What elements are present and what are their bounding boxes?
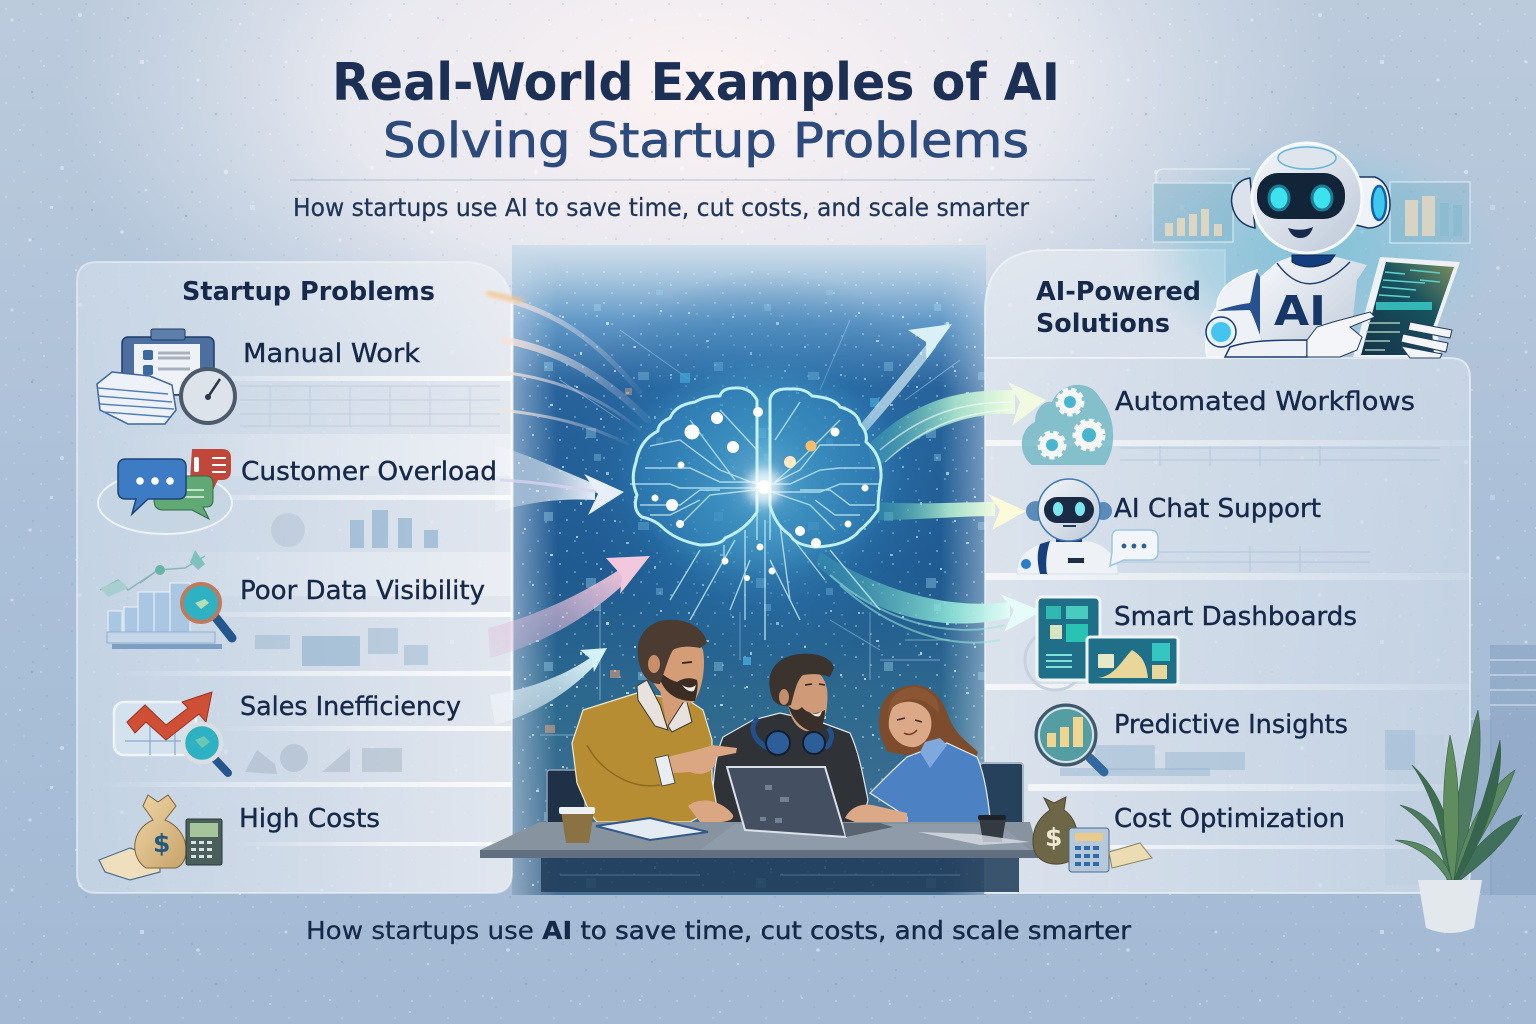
table top — [480, 822, 1038, 892]
coffee cup right — [978, 815, 1006, 842]
arrow: poor data visibility — [488, 556, 650, 658]
flow arrows out of brain — [816, 324, 1046, 643]
person: man in dark sweater — [712, 654, 868, 823]
flow arrows into brain — [488, 293, 650, 725]
left background chart — [1153, 169, 1250, 242]
label: manual work: Manual Work — [243, 339, 420, 369]
label: sales inefficiency: Sales Inefficiency — [240, 692, 461, 722]
right chair — [980, 763, 1023, 825]
label: cost optimization: Cost Optimization — [1114, 804, 1345, 834]
label: smart dashboards: Smart Dashboards — [1114, 602, 1357, 632]
label: predictive insights: Predictive Insights — [1114, 710, 1348, 740]
brain outline — [633, 388, 881, 547]
title: Solving Startup Problems — [383, 113, 1029, 169]
label: high costs: High Costs — [239, 804, 380, 834]
icon: chat bubbles — [98, 449, 232, 534]
laptop — [727, 767, 893, 837]
person: woman in blue shirt — [845, 685, 990, 827]
icon: money bag and calculator — [1033, 797, 1152, 872]
panel: AI-powered solutions — [985, 250, 1470, 893]
arrow: sales inefficiency — [490, 648, 607, 725]
background: skyline at right edge — [1385, 645, 1536, 895]
brain nodes — [652, 407, 868, 581]
brain core spark — [746, 469, 782, 505]
panel: center data scene — [512, 245, 986, 895]
heading: startup problems: Startup Problems — [182, 277, 435, 307]
plant pot — [1418, 880, 1482, 933]
arrow: automated workflows — [868, 382, 1046, 472]
icon: gears on cloud — [1022, 385, 1113, 465]
icon: clipboard, papers and clock — [97, 329, 235, 424]
icon: money bag and calculator — [99, 795, 222, 880]
notebook — [596, 818, 708, 840]
subtitle: How startups use AI to save time, cut costs, and scale smarter — [293, 193, 1030, 222]
robot hands — [1307, 312, 1452, 358]
icon: sales trend with magnifier — [114, 692, 228, 773]
icon: chat robot — [1017, 479, 1158, 574]
arrow: AI chat support — [878, 494, 1026, 530]
title divider — [290, 179, 1095, 181]
robot tablet — [1353, 257, 1460, 357]
icon: money bag and calculator: $ — [1045, 823, 1062, 852]
heading: AI-powered solutions: AI-Powered — [1036, 277, 1201, 307]
icon: data chart with magnifier — [100, 550, 232, 649]
person: man in mustard sweater — [572, 620, 737, 822]
robot mascot with dashboards — [1135, 135, 1505, 365]
coffee cup left — [559, 807, 595, 843]
label: automated workflows: Automated Workflows — [1115, 387, 1415, 417]
potted plant — [1395, 710, 1522, 933]
arrow: smart dashboards — [816, 552, 1042, 643]
heading: AI-powered solutions — [1036, 277, 1201, 339]
title: Real-World Examples of AI — [332, 53, 1060, 113]
title — [332, 53, 1060, 169]
robot AI badge: AI — [1274, 287, 1326, 335]
icon: predictive magnifier — [1036, 705, 1104, 772]
left chair — [547, 770, 585, 825]
label: customer overload: Customer Overload — [241, 457, 497, 487]
paper — [918, 832, 1030, 845]
table scene with team — [480, 620, 1038, 892]
arrow: customer overload — [495, 445, 624, 515]
circuit traces — [630, 400, 880, 640]
label: poor data visibility: Poor Data Visibility — [240, 576, 485, 606]
arrow: thin top wisps — [488, 293, 648, 444]
label: AI chat support: AI Chat Support — [1114, 494, 1321, 524]
footer tagline: How startups use AI to save time, cut costs, and scale smarter — [306, 916, 1132, 945]
heading: AI-powered solutions: Solutions — [1036, 309, 1170, 339]
right background chart — [1390, 182, 1470, 243]
robot torso and arms — [1206, 255, 1367, 357]
icon: smart dashboards — [1025, 597, 1178, 690]
icon: glowing circuit brain — [630, 380, 890, 640]
panel: startup problems — [77, 262, 512, 893]
icon: money bag and calculator: $ — [153, 829, 170, 858]
robot head — [1232, 143, 1390, 253]
arrow: upward — [860, 324, 952, 432]
